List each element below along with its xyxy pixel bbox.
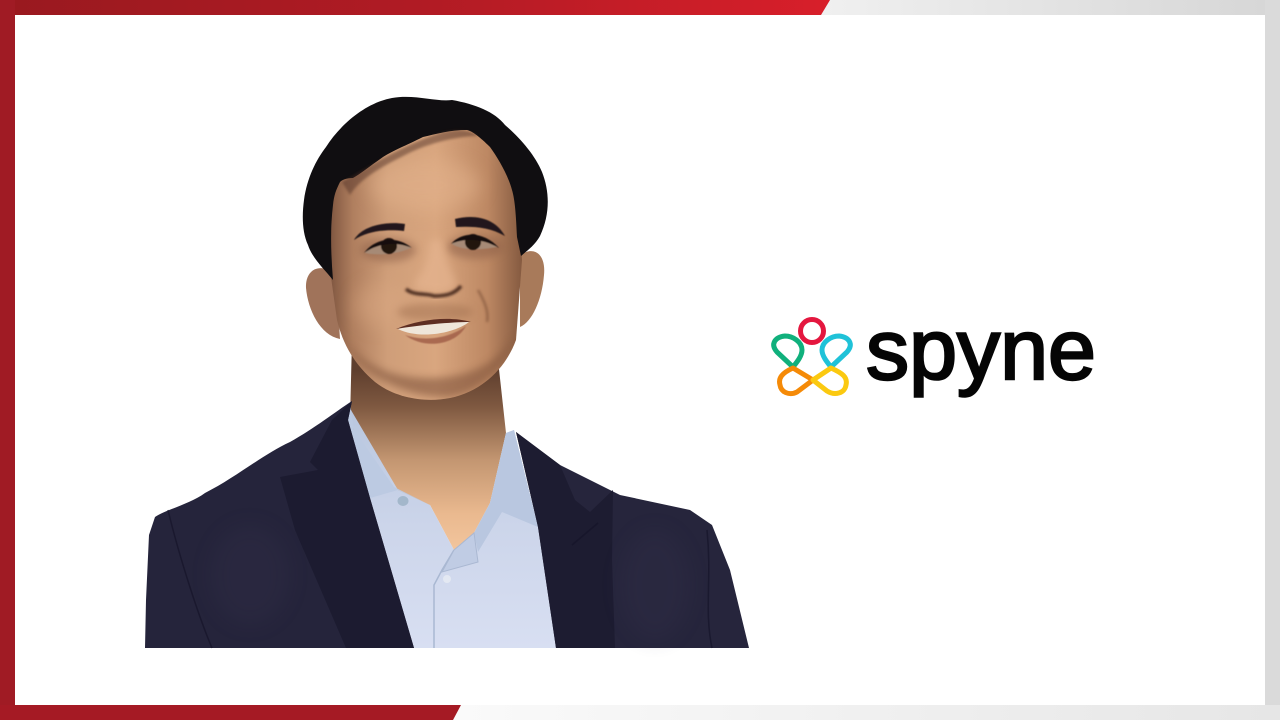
- shirt button: [398, 496, 408, 506]
- shirt: [348, 405, 556, 648]
- logo: spyne: [774, 303, 1096, 398]
- ears: [306, 268, 340, 339]
- eye right: [451, 234, 499, 250]
- eye left: [364, 238, 412, 254]
- jacket creases: [168, 510, 712, 648]
- hair: [303, 97, 548, 280]
- smile: [396, 290, 488, 344]
- wordmark: spyne: [866, 303, 1096, 398]
- shirt collar left: [348, 403, 430, 505]
- jacket left lapel: [280, 401, 414, 648]
- icon: spyne mark: [774, 320, 850, 394]
- jacket right side: [516, 432, 749, 648]
- neck: [350, 340, 506, 550]
- shirt placket: [434, 550, 454, 648]
- jacket left side: [145, 401, 414, 648]
- face shading: [345, 159, 515, 397]
- jacket right lapel: [516, 432, 615, 648]
- face: [330, 115, 522, 400]
- portrait photo illustration: [145, 97, 749, 648]
- eyebrows: [354, 223, 405, 240]
- shirt collar right: [474, 430, 538, 552]
- nose: [406, 240, 461, 296]
